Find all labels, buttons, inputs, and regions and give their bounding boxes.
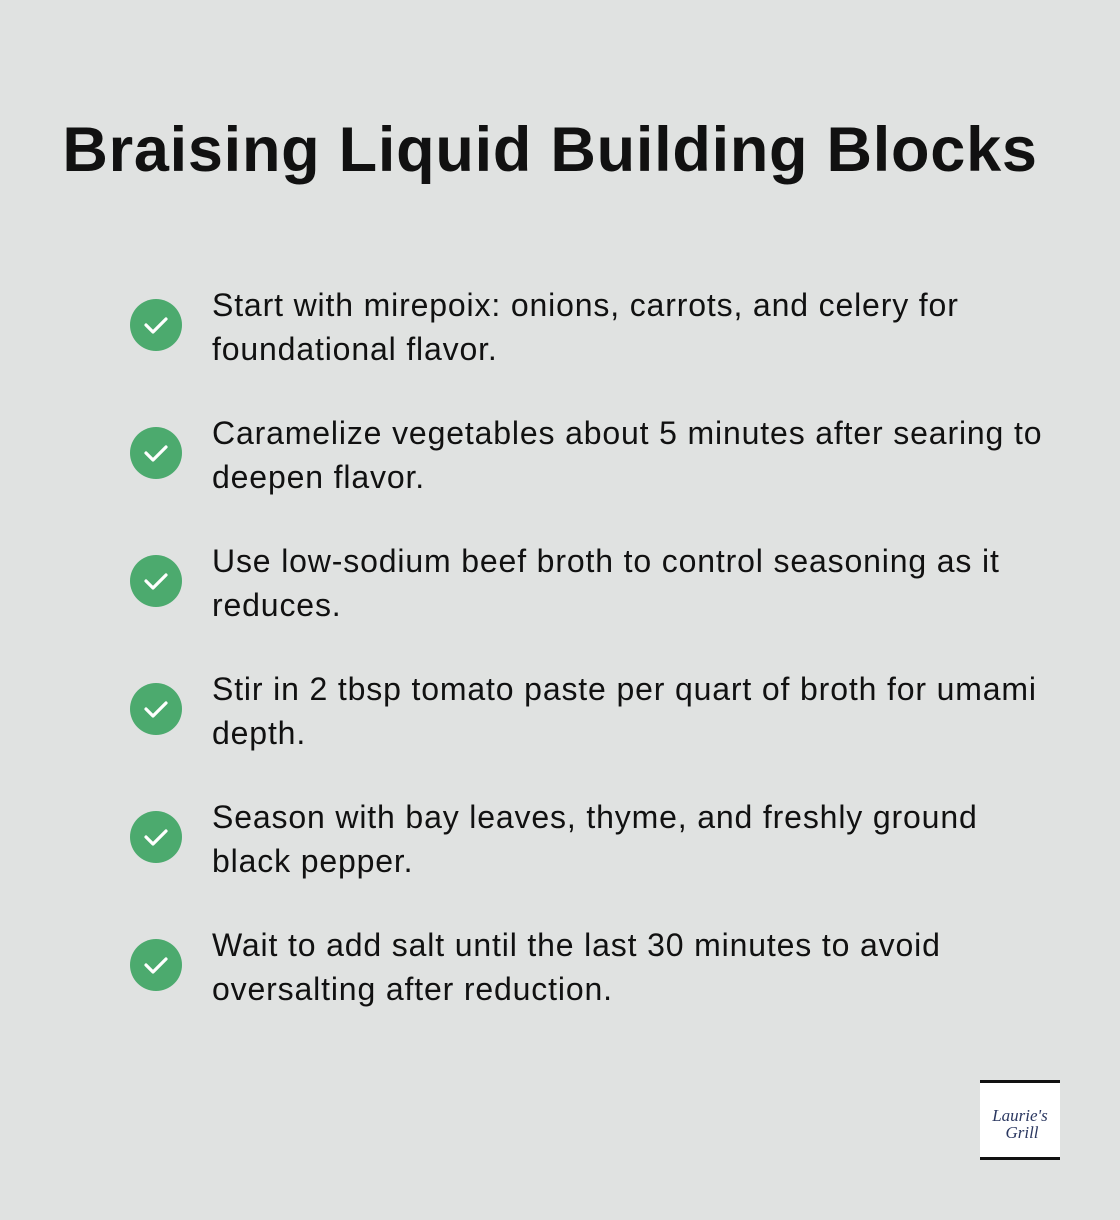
text: deepen flavor. [212, 459, 425, 495]
icon: check [130, 683, 182, 735]
logo: Grill [1005, 1123, 1039, 1142]
logo: Laurie's [991, 1106, 1048, 1125]
text: Caramelize vegetables about 5 minutes after searing to [212, 415, 1042, 451]
text [212, 543, 1000, 623]
text: foundational flavor. [212, 331, 498, 367]
text: Stir in 2 tbsp tomato paste per quart of broth for umami [212, 671, 1037, 707]
icon: check [130, 427, 182, 479]
item 2 [130, 415, 1042, 495]
text: oversalting after reduction. [212, 971, 613, 1007]
text [212, 799, 978, 879]
text [212, 415, 1042, 495]
text: Season with bay leaves, thyme, and freshly ground [212, 799, 978, 835]
icon: check [130, 939, 182, 991]
icon: check [130, 555, 182, 607]
title: Braising Liquid Building Blocks [62, 115, 1038, 185]
item 5 [130, 799, 978, 879]
item 3 [130, 543, 1000, 623]
item 6 [130, 927, 941, 1007]
text: black pepper. [212, 843, 413, 879]
text: Start with mirepoix: onions, carrots, and celery for [212, 287, 959, 323]
text: Wait to add salt until the last 30 minutes to avoid [212, 927, 941, 963]
text: reduces. [212, 587, 342, 623]
text [212, 671, 1037, 751]
text: Use low-sodium beef broth to control seasoning as it [212, 543, 1000, 579]
item 1 [130, 287, 959, 367]
icon: check [130, 299, 182, 351]
icon: check [130, 811, 182, 863]
text [212, 927, 941, 1007]
item 4 [130, 671, 1037, 751]
logo [980, 1080, 1060, 1160]
text [212, 287, 959, 367]
text: depth. [212, 715, 306, 751]
